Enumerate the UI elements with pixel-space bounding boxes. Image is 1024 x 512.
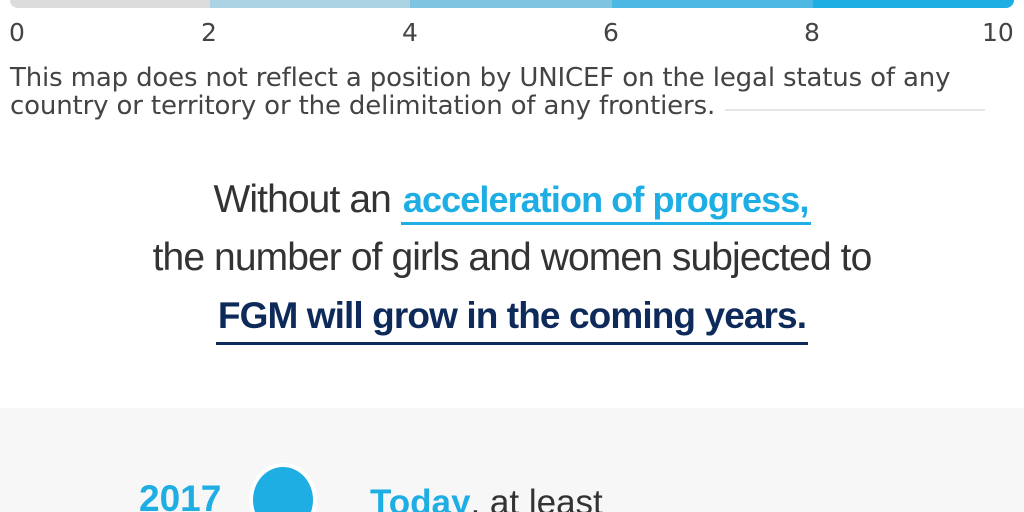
legend labels: 6 [603,18,619,47]
timeline section [0,408,1024,512]
timeline dot [249,463,317,512]
legend bar [10,0,1014,8]
legend labels [9,18,1014,47]
legend labels: 10 [982,18,1014,47]
disclaimer: This map does not reflect a position by UNICEF on the legal status of any [10,63,950,93]
headline: the number of girls and women subjected to [153,236,871,279]
legend labels: 0 [9,18,25,47]
headline: Without an acceleration of progress, [213,178,809,221]
disclaimer: country or territory or the delimitation of any frontiers. [10,91,715,121]
legend labels: 4 [402,18,418,47]
legend labels: 2 [201,18,217,47]
disclaimer [10,63,950,121]
legend labels: 8 [804,18,820,47]
headline: FGM will grow in the coming years. [218,295,806,336]
headline [153,178,871,345]
